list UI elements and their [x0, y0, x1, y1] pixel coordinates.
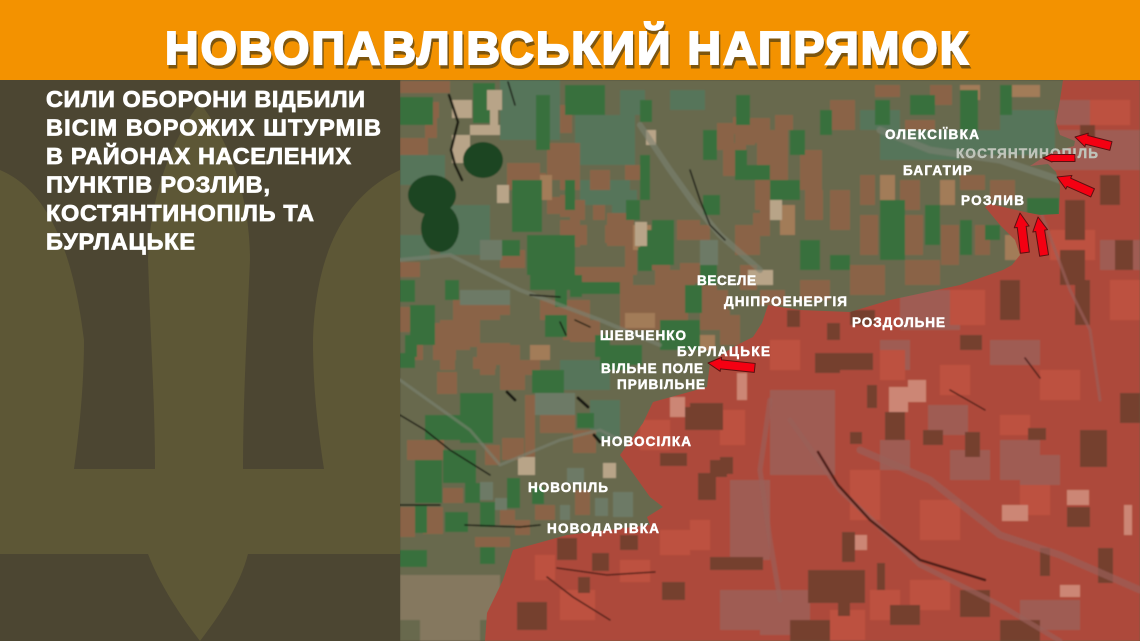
title: НОВОПАВЛІВСЬКИЙ НАПРЯМОК	[165, 22, 969, 74]
place labels: ПРИВІЛЬНЕ	[617, 377, 705, 392]
place labels: ДНІПРОЕНЕРГІЯ	[724, 294, 847, 309]
place labels	[528, 127, 1098, 536]
arrow: Rozliv east	[1031, 216, 1052, 257]
arrows: attack directions	[707, 130, 1113, 375]
arrow: Kostiantynopil south	[1054, 170, 1096, 200]
satellite map	[400, 80, 1140, 641]
left panel	[0, 80, 400, 641]
place labels: ШЕВЧЕНКО	[600, 328, 686, 343]
arrow: Kostiantynopil north	[1073, 130, 1113, 153]
place labels: НОВОСІЛКА	[601, 434, 691, 449]
occupied territory	[485, 80, 1140, 641]
place labels: ОЛЕКСІЇВКА	[885, 127, 979, 142]
place labels: РОЗЛИВ	[961, 193, 1024, 208]
place labels: НОВОПІЛЬ	[528, 480, 608, 495]
arrow: Kostiantynopil centre	[1043, 154, 1075, 162]
arrow: Burlatske	[707, 356, 755, 375]
place labels: КОСТЯНТИНОПІЛЬ	[956, 146, 1098, 161]
panel text: summary: В РАЙОНАХ НАСЕЛЕНИХ	[46, 142, 351, 169]
panel text: summary: ВІСІМ ВОРОЖИХ ШТУРМІВ	[46, 114, 381, 140]
trident emblem	[0, 103, 400, 641]
place labels: ВЕСЕЛЕ	[697, 273, 756, 288]
place labels: НОВОДАРІВКА	[547, 521, 659, 536]
panel text: summary	[46, 86, 381, 254]
panel text: summary: ПУНКТІВ РОЗЛИВ,	[46, 172, 270, 198]
place labels: БУРЛАЦЬКЕ	[677, 344, 770, 359]
arrow: Rozliv west	[1013, 212, 1032, 254]
place labels: БАГАТИР	[903, 163, 972, 178]
place labels: ВІЛЬНЕ ПОЛЕ	[601, 361, 703, 376]
place labels: РОЗДОЛЬНЕ	[852, 315, 945, 330]
panel text: summary: СИЛИ ОБОРОНИ ВІДБИЛИ	[46, 86, 365, 112]
panel text: summary: КОСТЯНТИНОПІЛЬ ТА	[46, 200, 314, 226]
panel text: summary: БУРЛАЦЬКЕ	[46, 228, 195, 254]
header band	[0, 0, 1140, 80]
